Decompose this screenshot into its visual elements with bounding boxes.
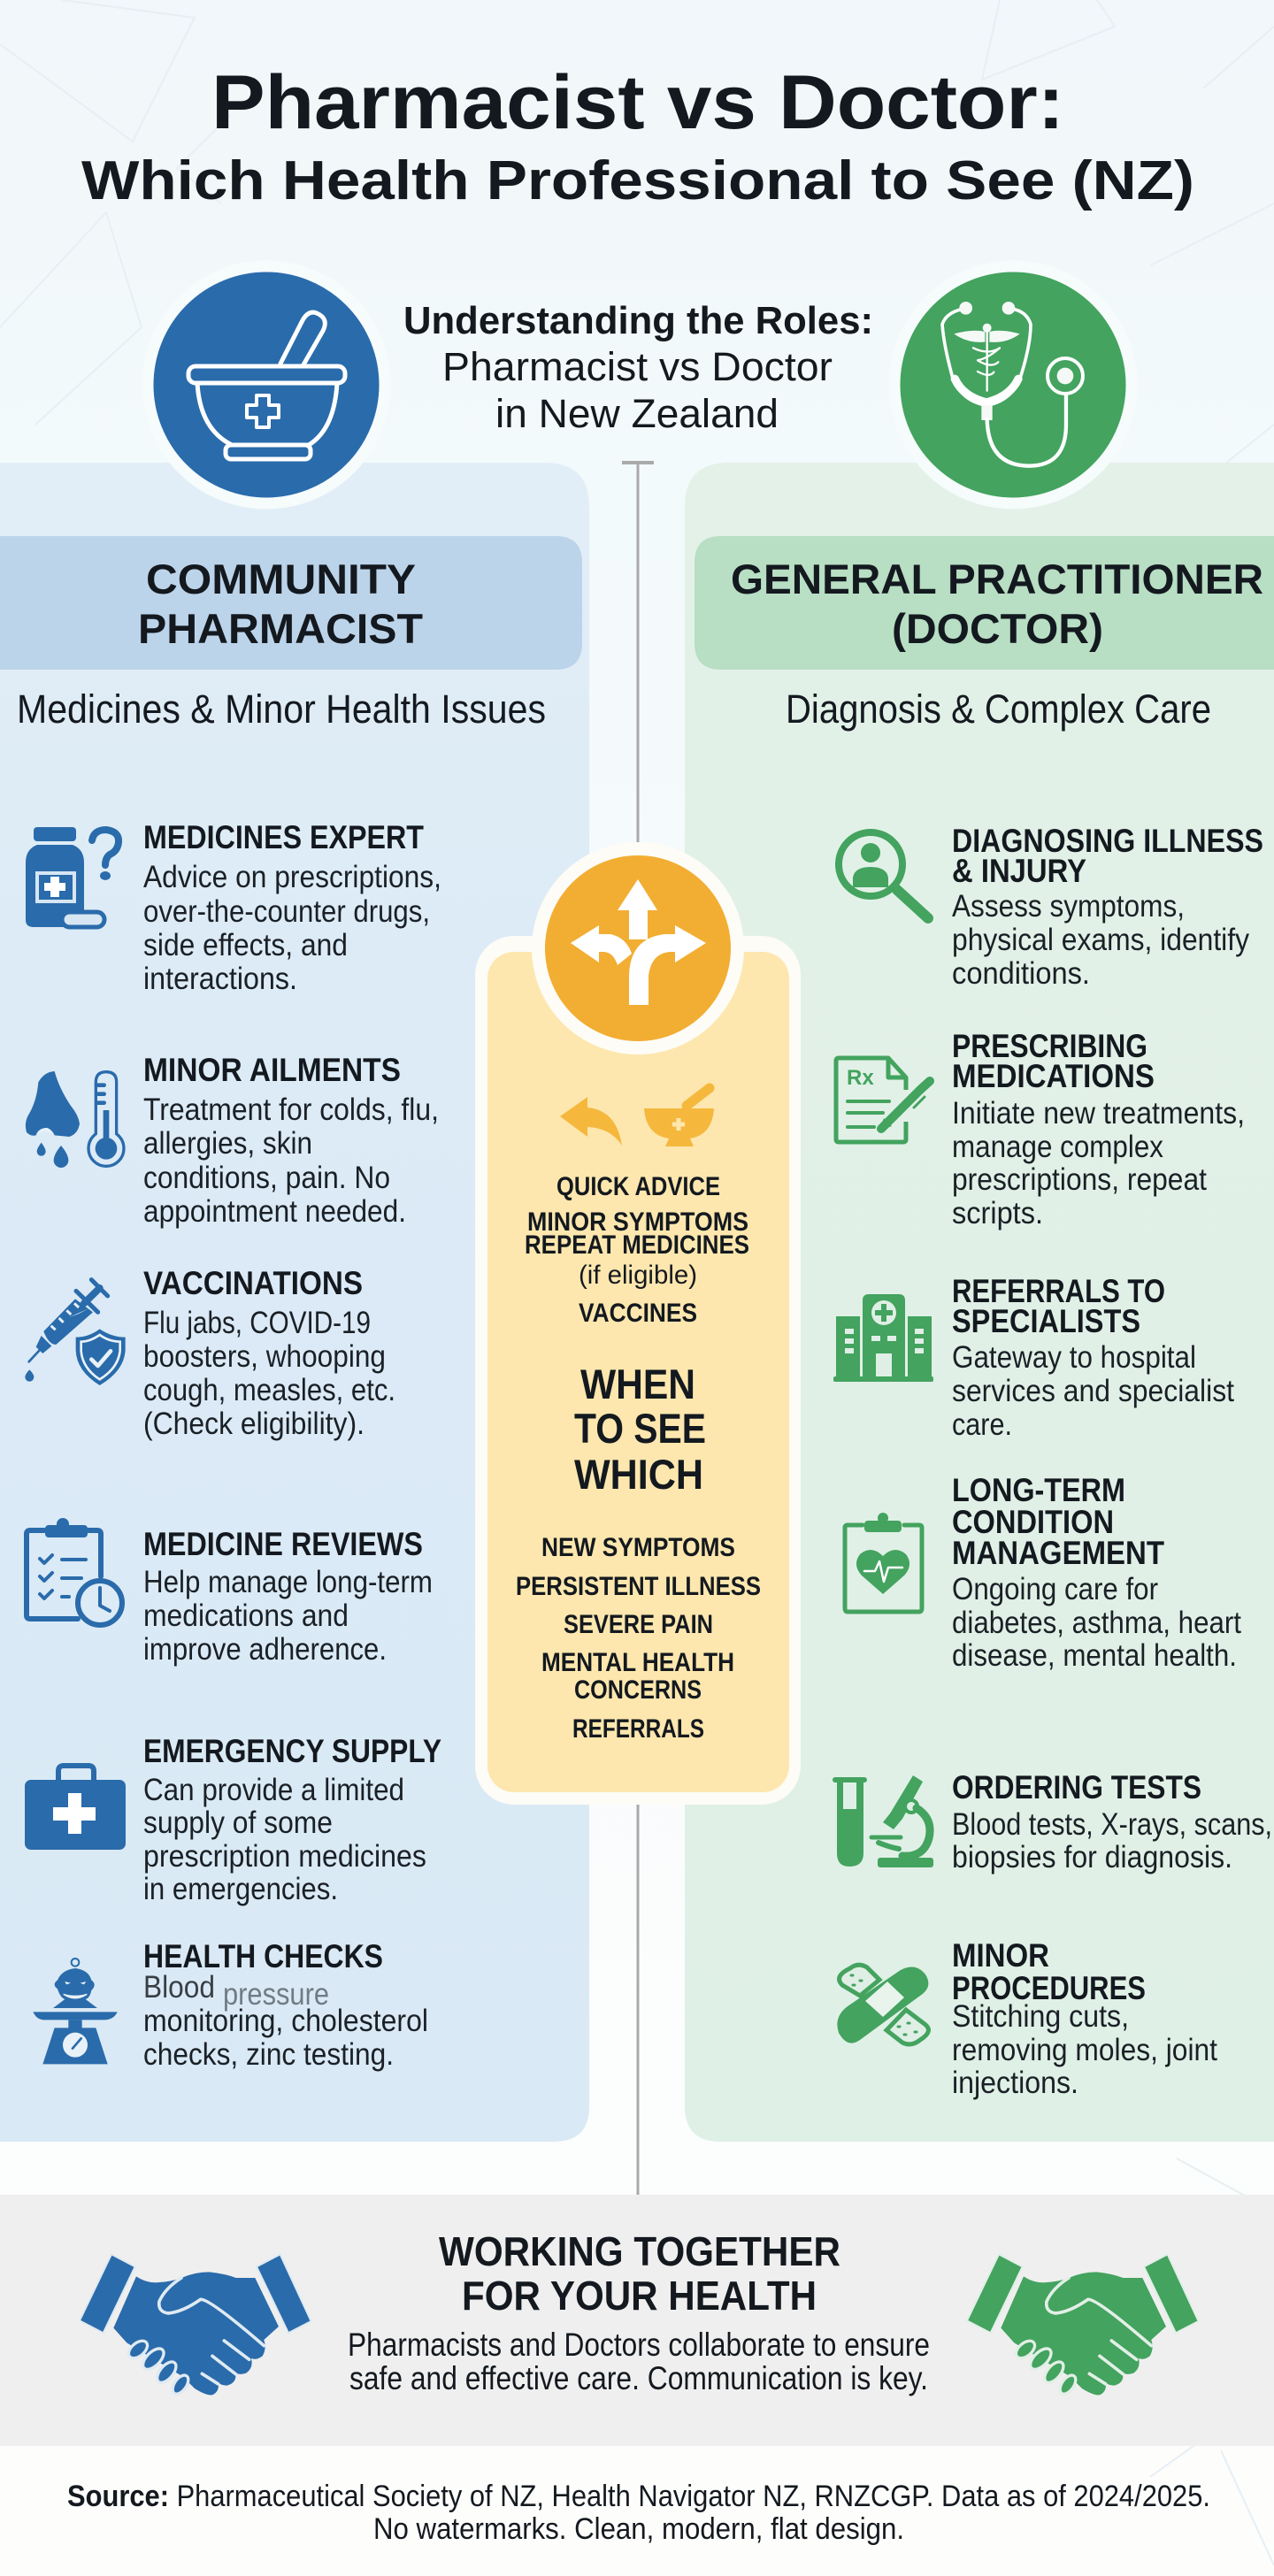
icon: prescription and pen [836,1058,930,1142]
icon: small mortar [644,1088,714,1146]
description: care. [952,1407,1012,1442]
description: collaboration: safe and effective care. Communication is key. [349,2360,928,2396]
pharmacist list: QUICK ADVICE [556,1172,720,1201]
description: Blood [143,1970,215,2005]
heading [952,823,1263,889]
description [952,1999,1217,2100]
heading [952,1273,1165,1339]
icon: checklist and clock [27,1518,122,1625]
description: improve adherence. [143,1632,387,1667]
item: medicines expert [26,819,441,996]
description [143,860,441,996]
heading: REFERRALS TO [952,1273,1165,1309]
description: over-the-counter drugs, [143,894,430,929]
heading: when to see which: TO SEE [574,1405,706,1452]
heading: CONDITION [952,1504,1114,1540]
description: Ongoing care for [952,1572,1158,1606]
description [143,1306,395,1441]
description: cough, measles, etc. [143,1373,395,1407]
doctor list: MENTAL HEALTH [541,1648,734,1677]
heading: LONG-TERM [952,1472,1125,1508]
item: vaccinations [25,1265,395,1441]
subheading: medicines and minor health issues: Medicines & Minor Health Issues [17,686,546,732]
description: side effects, and [143,928,348,962]
header band: community pharmacist [0,536,582,670]
header band: community pharmacist: PHARMACIST [138,605,423,652]
heading: when to see which: WHEN [580,1361,695,1407]
title [81,60,1194,211]
description: allergies, skin [143,1126,312,1161]
heading: working together [439,2228,840,2319]
icon: medical kit [25,1766,126,1850]
icon: green handshake [967,2254,1199,2396]
description: interactions. [143,962,297,996]
doctor list: CONCERNS [574,1675,702,1705]
panel: community pharmacist [0,463,589,2142]
description: Treatment for colds, flu, [143,1092,439,1127]
pharmacist list: MINOR SYMPTOMS [527,1208,748,1237]
description [952,889,1249,991]
description: removing moles, joint [952,2033,1217,2067]
pharmacist list: (if eligible) [579,1261,697,1290]
item: emergency supply [25,1733,441,1906]
description: Gateway to hospital [952,1340,1196,1375]
icon: back arrow [560,1097,622,1146]
item: minor procedures [837,1937,1217,2100]
item: prescribing medications [836,1028,1245,1230]
description: supply of some [143,1806,333,1840]
heading: working together: FOR YOUR HEALTH [462,2273,817,2319]
heading: EMERGENCY SUPPLY [143,1733,441,1769]
heading: MINOR AILMENTS [143,1052,401,1088]
item: referrals to specialists [833,1273,1234,1442]
heading: working together: WORKING TOGETHER [439,2228,840,2274]
description: collaboration [348,2327,930,2396]
icon: mortar and pestle circle [148,266,385,503]
description: diabetes, asthma, heart [952,1606,1241,1640]
icon: hospital building [833,1294,933,1382]
description: checks, zinc testing. [143,2037,394,2072]
description [952,1572,1241,1673]
pharmacist list: VACCINES [579,1299,697,1328]
item: diagnosing illness and injury [839,823,1263,991]
title: Pharmacist vs Doctor: [211,60,1064,145]
doctor list: REFERRALS [572,1714,704,1744]
icon: syringe and shield [25,1280,126,1385]
item: health checks [33,1938,428,2072]
description: services and specialist [952,1374,1234,1408]
description: Help manage long-term [143,1565,433,1599]
heading: when to see which: WHICH [574,1451,703,1498]
heading: & INJURY [952,853,1086,889]
subtitle: understanding the roles: in New Zealand [495,391,779,436]
heading: PRESCRIBING [952,1028,1147,1064]
header band: general practitioner [695,536,1274,670]
description: collaboration: Pharmacists and Doctors collaborate to ensure [348,2327,930,2363]
icon: magnifier over person [839,832,928,918]
heading: MINOR [952,1937,1049,1974]
description: monitoring, cholesterol [143,2004,428,2038]
description: scripts. [952,1196,1043,1230]
description: Flu jabs, COVID-19 [143,1306,371,1340]
icon: blue handshake [80,2254,311,2396]
description [952,1340,1234,1442]
description [143,1565,433,1667]
subheading: diagnosis and complex care: Diagnosis & Complex Care [786,686,1211,732]
icon: prescription and pen: Rx [847,1066,874,1090]
description: prescriptions, repeat [952,1162,1207,1197]
icon: three-way arrows [532,842,744,1054]
heading [952,1937,1146,2006]
doctor list: PERSISTENT ILLNESS [516,1572,761,1601]
header band: community pharmacist: COMMUNITY [146,556,416,602]
description: appointment needed. [143,1194,406,1229]
icon: stethoscope with caduceus circle [894,266,1132,503]
doctor list: SEVERE PAIN [564,1610,713,1639]
icon: baby on scale [33,1959,118,2064]
description: pressure [223,1977,329,2012]
description: Advice on prescriptions, [143,860,441,894]
heading: VACCINATIONS [143,1265,363,1301]
icon: clipboard with heart [845,1513,922,1612]
description: Stitching cuts, [952,1999,1129,2034]
heading [952,1028,1155,1094]
heading: SPECIALISTS [952,1303,1140,1339]
subtitle: understanding the roles: Pharmacist vs Doctor [442,344,833,389]
header band: general practitioner: (DOCTOR) [892,605,1103,652]
description [143,1970,428,2072]
icon: crossed bandages [837,1965,928,2044]
pharmacist list: REPEAT MEDICINES [525,1230,749,1260]
description: prescription medicines [143,1839,426,1874]
item: medicine reviews [27,1518,433,1667]
heading: MEDICINES EXPERT [143,819,424,855]
heading [952,1472,1164,1571]
description: Assess symptoms, [952,889,1185,924]
description: biopsies for diagnosis. [952,1840,1232,1874]
description: Initiate new treatments, [952,1096,1245,1131]
panel: when to see which [475,842,801,1805]
item: ordering tests [833,1769,1272,1874]
panel: working together [0,2195,1274,2446]
description: in emergencies. [143,1872,338,1906]
heading: MEDICINE REVIEWS [143,1526,423,1562]
description: medications and [143,1598,349,1633]
description: boosters, whooping [143,1339,386,1374]
heading: ORDERING TESTS [952,1769,1201,1806]
description [143,1773,426,1906]
header band: general practitioner: GENERAL PRACTITIONER [731,556,1263,602]
pharmacist list [525,1172,749,1328]
subtitle: understanding the roles: Understanding the Roles: [403,299,873,342]
heading: PROCEDURES [952,1970,1146,2006]
source footer: No watermarks. Clean, modern, flat design. [373,2512,904,2546]
heading: when to see which [574,1361,706,1498]
heading: MEDICATIONS [952,1058,1155,1094]
heading: MANAGEMENT [952,1535,1164,1571]
doctor list: NEW SYMPTOMS [541,1533,735,1562]
description: conditions. [952,956,1090,991]
icon: medicine bottle with question mark [26,827,119,927]
icon: nose and thermometer [26,1071,124,1168]
doctor list [516,1533,761,1744]
icon: test tube and microscope [833,1775,933,1867]
panel: general practitioner [685,463,1274,2142]
item: minor ailments [26,1052,439,1229]
description [952,1096,1245,1230]
description [952,1807,1272,1874]
description: physical exams, identify [952,923,1249,957]
description: disease, mental health. [952,1638,1237,1673]
description: conditions, pain. No [143,1161,390,1195]
item: long-term condition management [845,1472,1241,1673]
description: injections. [952,2066,1078,2100]
heading: HEALTH CHECKS [143,1938,383,1974]
title: Which Health Professional to See (NZ) [81,150,1194,211]
description: (Check eligibility). [143,1407,365,1441]
description [143,1092,439,1229]
subtitle: understanding the roles [403,299,873,436]
source footer [67,2480,1210,2546]
description: manage complex [952,1130,1163,1164]
description: Can provide a limited [143,1773,404,1807]
